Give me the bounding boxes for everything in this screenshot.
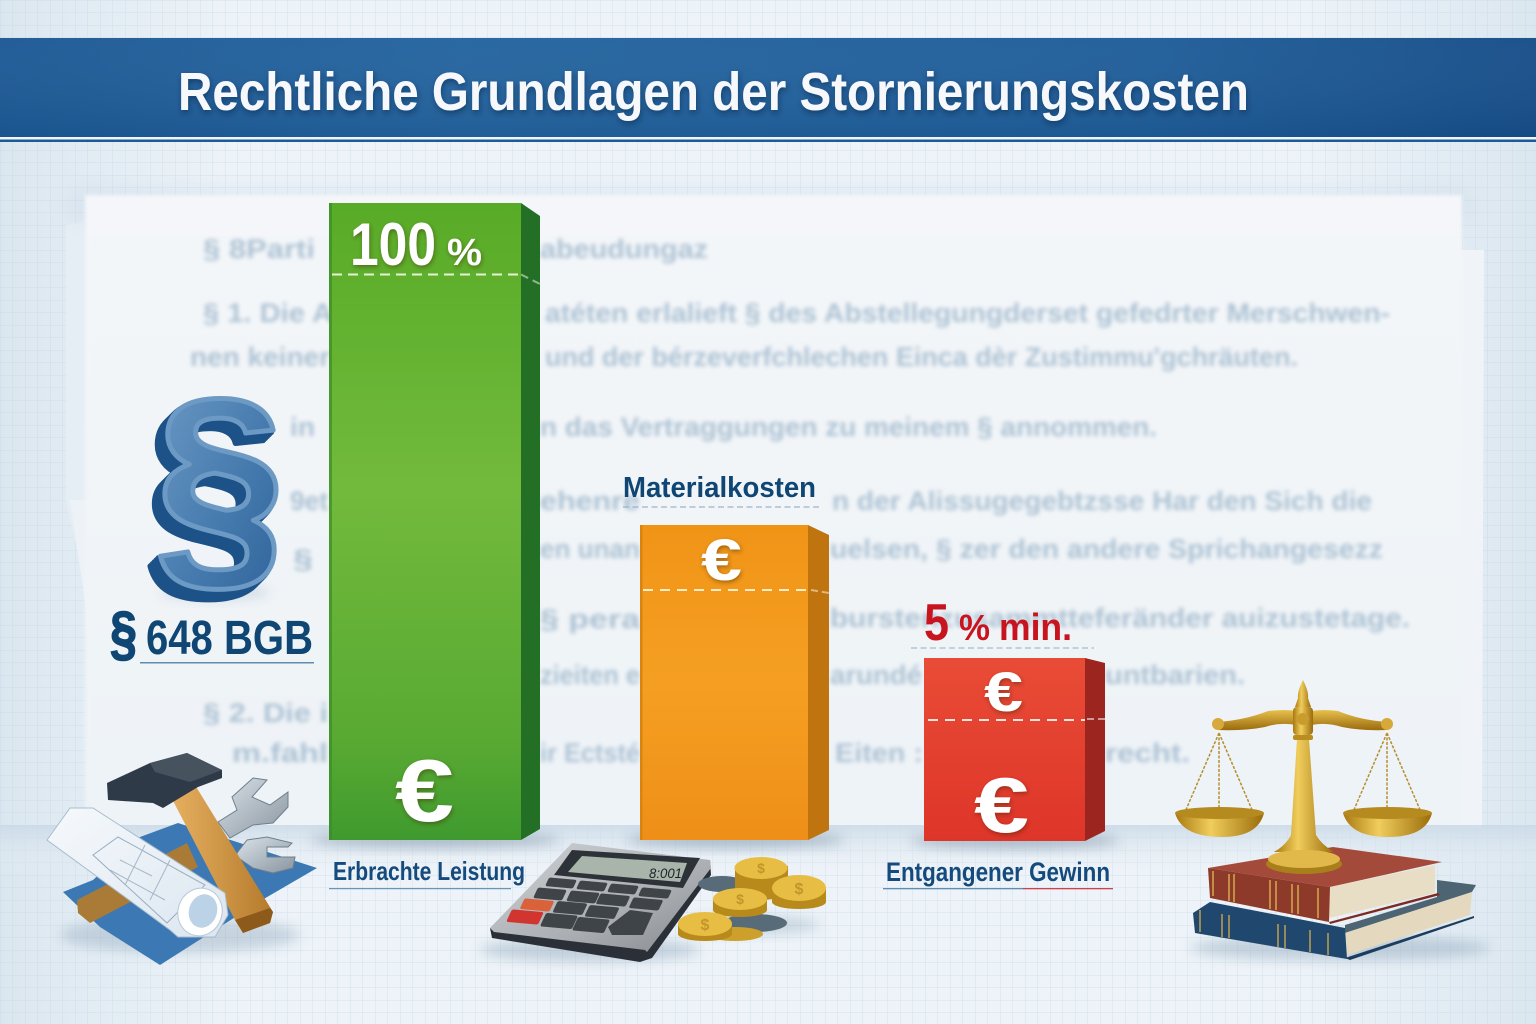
pans [1175,813,1264,837]
value: 5 % min. [911,594,1094,652]
calculator screen [554,850,700,888]
icon: golden scales [1175,680,1432,874]
chains [1185,733,1421,812]
bar: Erbrachte Leistung 100 % [310,203,560,848]
icon: paragraph symbol: § [152,352,284,616]
coin stack top [734,857,788,900]
icon: hammer, wrench and blueprint [47,753,317,965]
coin stack right: $ [795,881,804,898]
document blurred text: n das Vertraggungen zu meinem § annommen. [540,412,1157,442]
document blurred text: uelsen, § zer den andere Sprichangesezz [830,534,1383,564]
label: § 648 BGB: § [110,600,137,667]
base [1266,854,1342,874]
wooden block [77,843,198,923]
value: 5 % min.: min. [999,607,1072,649]
document blurred text: und der bérzeverfchlechen Einca dèr Zustimmu'gchräuten. [545,342,1298,372]
blueprint roll [47,808,228,937]
icon: euro: € [395,741,454,840]
icon: paragraph symbol: § [150,354,282,618]
hammer handle [170,785,273,933]
label: Erbrachte Leistung: Erbrachte Leistung [333,856,525,886]
document blurred text [190,234,1410,768]
beam [1218,710,1387,730]
value: 5 % min.: % [959,607,990,648]
label: § 648 BGB: 648 BGB [146,612,313,665]
document blurred text: nen keiner [190,342,331,372]
document blurred text: atéten erlalieft § des Abstellegungderset gefedrter Merschwen- [545,298,1390,328]
icon: books [1190,847,1490,961]
hammer head [107,753,222,808]
bar: Materialkosten [625,525,845,848]
document blurred text: Eiten : [835,738,923,768]
coin stack middle: $ [736,891,744,907]
document blurred text: § 2. Die i [203,698,328,728]
document blurred text: en unan [540,534,640,564]
icon: paragraph symbol: § [154,350,286,614]
icon: euro top: € [984,660,1023,723]
bar: Entgangener Gewinn [910,658,1120,849]
post [1274,739,1334,852]
value: 5 % min.: 5 [924,594,949,652]
label: § 648 BGB [110,600,314,667]
document blurred text: 9et [290,486,328,516]
icon: calculator [480,843,711,962]
title: Rechtliche Grundlagen der Stornierungskosten [178,62,1249,122]
calculator keys [506,877,672,935]
coin stack front [678,912,732,941]
document blurred text: abeudungaz [540,234,708,264]
document blurred text: § 8Parti [203,234,315,264]
icon: euro: € [701,528,742,593]
icon: euro bottom: € [974,761,1029,849]
icon: paragraph symbol: § [144,360,276,624]
coin stack middle [713,888,767,917]
wrench [218,778,295,873]
document blurred text: m.fahl [232,738,328,768]
document blurred text: untbarien. [1105,660,1245,690]
document blurred text: arundé [830,660,922,690]
icon: paragraph symbol: § [146,358,278,622]
blue sheet [63,823,317,965]
document blurred text: recht. [1105,738,1190,768]
header band [0,38,1536,142]
document blurred text: zieiten e [540,660,640,690]
coin stack front: $ [701,917,710,934]
document blurred text: § [293,544,313,574]
document blurred text: § 1. Die A [203,298,333,328]
document blurred text: in [290,412,315,442]
icon: coins [678,857,826,941]
coin stack top: $ [757,860,765,876]
label: Materialkosten: Materialkosten [623,472,816,504]
value: 100 %: 100 [350,211,436,278]
document blurred text: ir Ectsté [540,738,640,768]
document blurred text: ehenre [540,486,640,516]
icon: calculator: 8:001 [649,865,682,881]
document blurred text: burstenzusammtteferänder auizustetage. [830,603,1410,633]
document blurred text: n der Alissugegebtzsse Har den Sich die [832,486,1372,516]
value: 100 %: % [447,232,482,274]
document blurred text: § pera [540,604,641,634]
blue book [1193,880,1476,960]
panel: legal document background [0,190,1536,875]
coin stack right [772,875,826,909]
icon: paragraph symbol: § [148,356,280,620]
label: Entgangener Gewinn: Entgangener Gewinn [886,857,1110,887]
red book [1208,847,1442,924]
